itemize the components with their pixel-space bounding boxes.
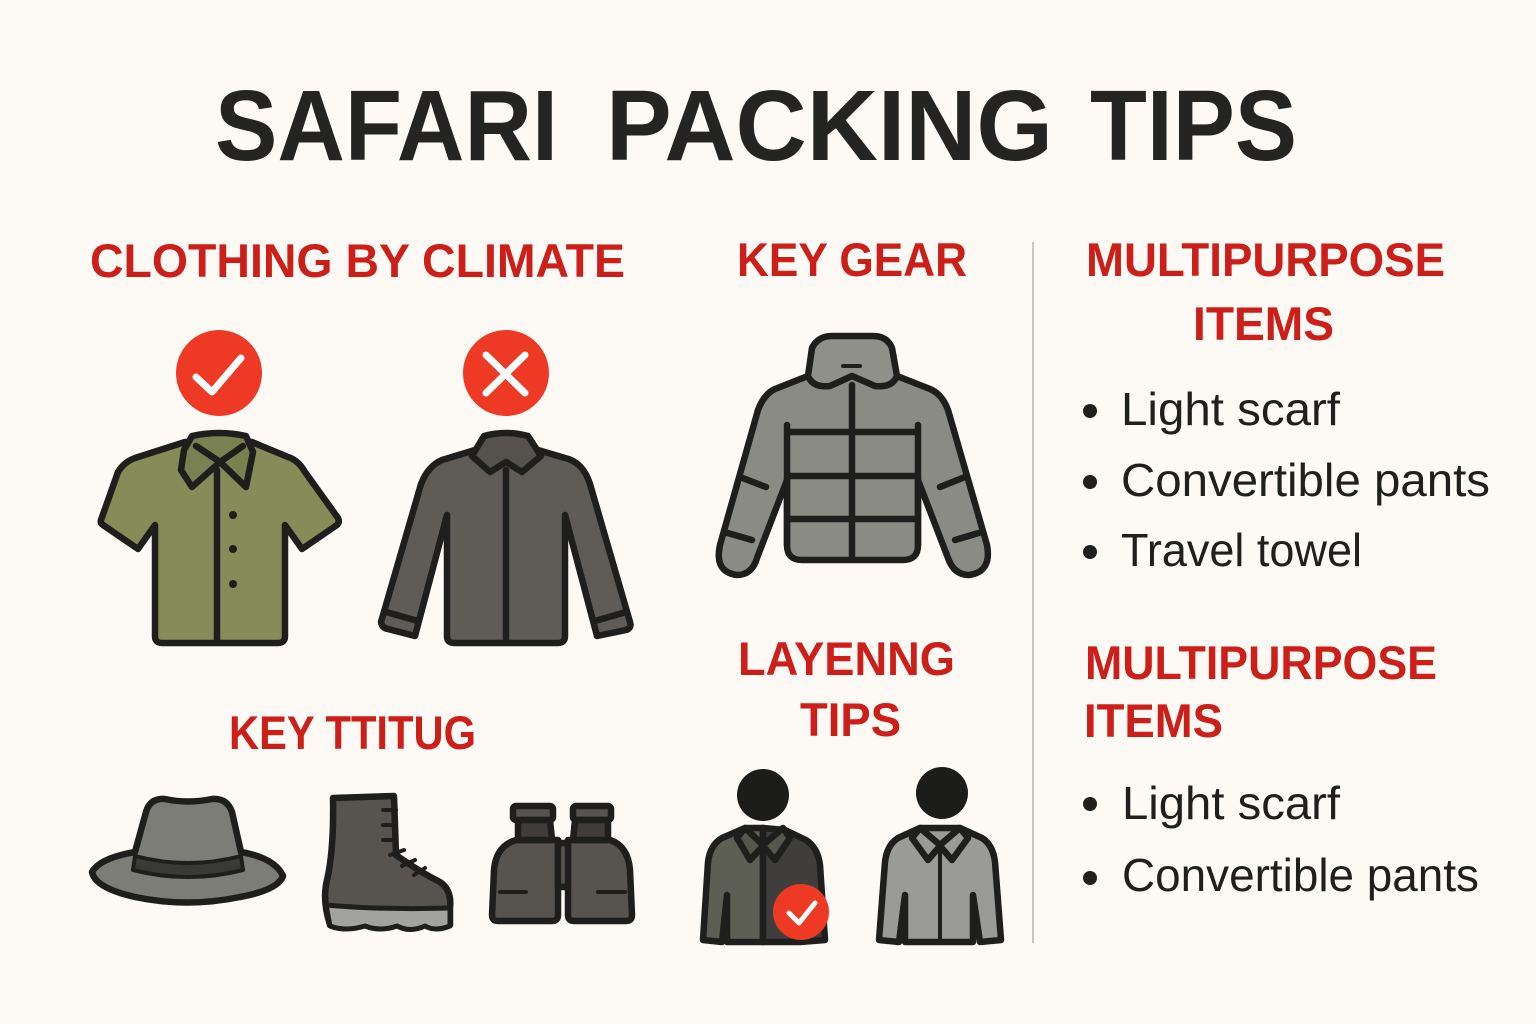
panel: multipurpose items top: ITEMS [1193, 297, 1334, 350]
list: top items: Convertible pants [1121, 454, 1490, 506]
heading: key titug: KEY TTITUG [229, 706, 476, 759]
icon: puffer jacket [719, 336, 988, 575]
panel: layering tips [703, 632, 1001, 942]
heading: layering tips: LAYENNG [738, 632, 955, 685]
icon: check badge [176, 330, 262, 416]
panel: layering tips: TIPS [800, 693, 901, 746]
panel: multipurpose items bottom [1083, 636, 1479, 901]
title: TIPS [1090, 70, 1297, 182]
list: top items: Travel towel [1121, 524, 1362, 576]
list: top items [1083, 383, 1490, 576]
panel: key gear [719, 233, 988, 575]
icon: dark long sleeve jacket [381, 433, 630, 643]
panel: multipurpose items top [1083, 233, 1490, 576]
icon: boot [325, 796, 450, 930]
heading: clothing by climate: CLOTHING BY CLIMATE [90, 234, 625, 287]
list: bottom items: Convertible pants [1122, 849, 1479, 901]
title [215, 70, 1297, 182]
icon: single layer figure [879, 767, 1001, 942]
panel: key titug [92, 706, 632, 930]
icon: safari hat [92, 799, 283, 902]
icon: short sleeve shirt [101, 433, 339, 643]
panel: multipurpose items bottom: ITEMS [1084, 694, 1223, 747]
heading: key gear: KEY GEAR [737, 233, 967, 286]
icon: layered figure with check [703, 769, 829, 942]
icon: cross badge [463, 330, 549, 416]
panel: clothing by climate [90, 234, 630, 643]
title: SAFARI [215, 70, 558, 182]
icon: binoculars [492, 806, 632, 921]
list: bottom items: Light scarf [1122, 777, 1340, 829]
title: PACKING [606, 70, 1053, 182]
heading: multipurpose items top: MULTIPURPOSE [1086, 233, 1445, 286]
list: top items: Light scarf [1121, 383, 1340, 435]
heading: multipurpose items bottom: MULTIPURPOSE [1085, 636, 1437, 689]
list: bottom items [1083, 777, 1479, 901]
